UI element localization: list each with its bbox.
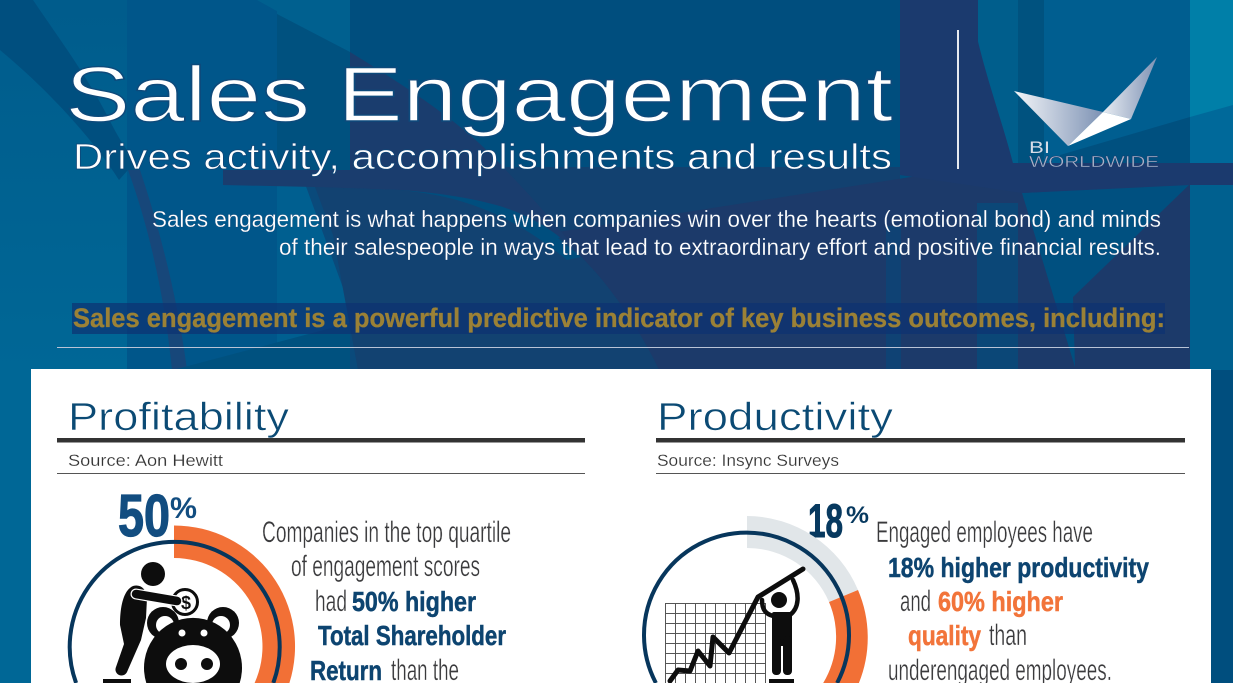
grey progress arc: [747, 516, 858, 602]
intro text: Sales engagement is what happens when companies win over the hearts (emotional bond) and minds: [152, 206, 1161, 232]
subtitle: Drives activity, accomplishments and results: [73, 136, 892, 177]
18% figure: %: [846, 502, 869, 529]
navy ring: [70, 542, 280, 683]
productivity text: than: [989, 619, 1027, 652]
profitability heading: Profitability: [68, 396, 290, 439]
intro text: of their salespeople in ways that lead to extraordinary effort and positive financial results.: [279, 234, 1161, 260]
productivity text: Engaged employees have: [876, 516, 1093, 549]
orange progress arc: [174, 526, 295, 683]
icon: person feeding piggy bank: $: [181, 593, 191, 613]
productivity text: 60% higher: [938, 586, 1063, 617]
productivity text: 18% higher productivity: [888, 552, 1149, 583]
icon: person feeding piggy bank: [103, 562, 242, 683]
productivity text: quality: [908, 620, 981, 651]
orange progress arc: [823, 590, 868, 683]
header divider: [957, 30, 959, 169]
profitability text: [262, 516, 511, 683]
productivity heading: Productivity: [657, 396, 894, 439]
intro text: [152, 206, 1161, 260]
productivity text: and: [900, 585, 931, 618]
profitability text: Companies in the top quartile: [262, 516, 511, 549]
highlighted key statement: Sales engagement is a powerful predictive indicator of key business outcomes, including:: [73, 303, 1165, 333]
logo: BI Worldwide: BI: [1029, 138, 1050, 157]
section: profitability: [57, 396, 585, 683]
navy ring: [644, 533, 849, 683]
white content panel: [31, 369, 1211, 683]
18% figure: 18: [808, 494, 843, 547]
chart grid: [665, 603, 766, 683]
profitability source: Source: Aon Hewitt: [68, 451, 223, 470]
section: productivity: [644, 396, 1185, 683]
profitability text: had: [315, 585, 347, 618]
logo: BI Worldwide: WORLDWIDE: [1029, 154, 1159, 171]
profitability text: Total Shareholder: [318, 620, 506, 651]
title: Sales Engagement: [65, 50, 893, 138]
icon: person lifting rising chart line: [670, 569, 803, 683]
50% figure: %: [170, 492, 197, 525]
profitability text: 50% higher: [352, 586, 476, 617]
50% figure: 50: [118, 483, 170, 549]
productivity text: [876, 516, 1149, 683]
productivity source: Source: Insync Surveys: [657, 451, 839, 470]
profitability text: of engagement scores: [291, 550, 480, 583]
logo: BI Worldwide: [1014, 57, 1159, 171]
